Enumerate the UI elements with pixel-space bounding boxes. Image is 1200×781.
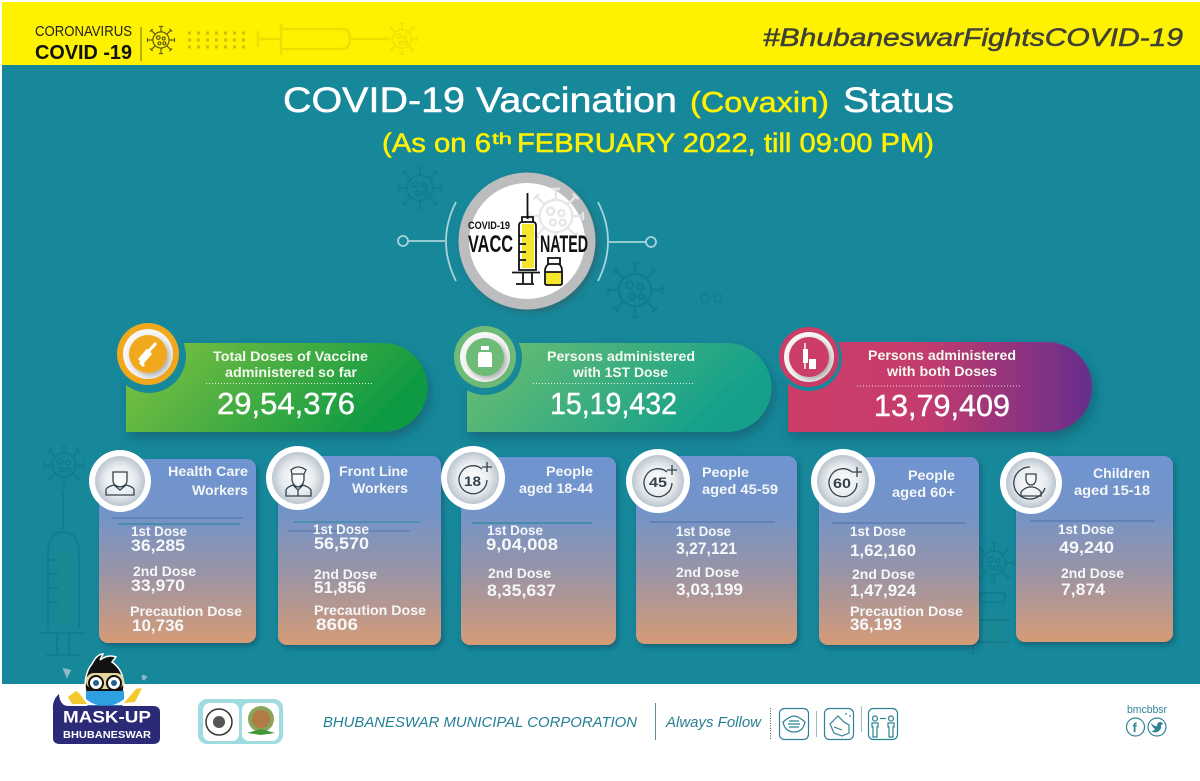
mask-up bhubaneswar logo <box>53 654 160 744</box>
icon: social distance <box>868 708 898 740</box>
top yellow header <box>2 2 1200 65</box>
panel: people aged 60 plus: Precaution Dose <box>850 604 964 619</box>
panel: both doses: 13,79,409 <box>874 388 1010 423</box>
panel: people aged 18-44: 2nd Dose <box>488 566 552 581</box>
subtitle date: th <box>492 131 512 148</box>
panel: health care workers: Precaution Dose <box>130 604 243 619</box>
government emblems <box>198 699 283 744</box>
panel: people aged 45-59: 3,27,121 <box>676 540 737 558</box>
icon: 45 plus: 45 <box>649 474 667 490</box>
social media handle: f <box>1132 720 1138 735</box>
panel: front line workers: 8606 <box>316 616 358 634</box>
icon: vial badge green <box>454 326 516 388</box>
icon: child <box>1000 452 1062 514</box>
badge text: VACC <box>468 231 513 258</box>
always follow text: Always Follow <box>665 714 762 731</box>
panel: front line workers: 56,570 <box>314 535 369 553</box>
panel: people aged 45-59: 3,03,199 <box>676 581 743 599</box>
panel: first dose: 15,19,432 <box>550 386 677 421</box>
icon: virus in header <box>148 26 174 54</box>
panel: front line workers <box>266 446 441 645</box>
panel: total doses: administered so far <box>225 365 358 380</box>
panel: people aged 60 plus: 1st Dose <box>850 524 906 539</box>
panel: both doses: Persons administered <box>868 348 1016 363</box>
connectors <box>398 202 656 281</box>
panel: people aged 60 plus: 1,62,160 <box>850 542 916 560</box>
panel: first dose <box>448 321 772 432</box>
panel: both doses: with both Doses <box>886 364 997 379</box>
icon: health worker <box>89 450 151 512</box>
decorative dots and syringe <box>188 24 417 55</box>
background watermark icons <box>40 166 1014 655</box>
subtitle date <box>382 128 934 158</box>
panel: total doses: Total Doses of Vaccine <box>213 349 369 364</box>
header label: coronavirus covid-19: CORONAVIRUS <box>35 24 132 40</box>
panel: health care workers: 33,970 <box>131 577 185 595</box>
icon: syringe and vial badge pink <box>779 327 839 387</box>
syringe icon <box>512 193 540 284</box>
panel: front line workers: Precaution Dose <box>314 603 427 618</box>
mascot <box>65 654 145 708</box>
panel: people aged 45-59: 2nd Dose <box>676 565 740 580</box>
panel: health care workers <box>89 450 256 643</box>
subtitle date: (As on 6 <box>382 128 491 158</box>
header label: coronavirus covid-19: COVID -19 <box>35 42 132 64</box>
panel: children aged 15-18: 7,874 <box>1061 581 1106 599</box>
panel: people aged 18-44 <box>441 446 616 645</box>
panel: children aged 15-18: 1st Dose <box>1058 522 1114 537</box>
panel: health care workers: 1st Dose <box>131 524 187 539</box>
icon: 18 plus: 18 <box>464 473 481 489</box>
hashtag: #BhubaneswarFightsCOVID-19 <box>763 24 1183 52</box>
mask-up bhubaneswar logo: MASK-UP <box>63 708 151 726</box>
title: COVID-19 Vaccination <box>283 81 677 120</box>
subtitle date: FEBRUARY 2022, till 09:00 PM) <box>517 128 934 158</box>
panel: children aged 15-18 <box>1000 452 1173 642</box>
icon: 60 plus: 60 <box>833 475 851 491</box>
icon: 60 plus <box>811 449 875 513</box>
panel: people aged 45-59: aged 45-59 <box>702 482 778 497</box>
icon: syringe badge orange <box>117 323 179 385</box>
panel: children aged 15-18: 49,240 <box>1059 539 1114 557</box>
panel: health care workers: 36,285 <box>131 537 185 555</box>
panel: people aged 60 plus: aged 60+ <box>892 485 955 500</box>
icon: front line worker <box>266 446 330 510</box>
panel: total doses: 29,54,376 <box>217 386 355 421</box>
panel: people aged 18-44: People <box>546 464 594 479</box>
panel: people aged 60 plus: 1,47,924 <box>850 582 917 600</box>
panel: people aged 60 plus <box>811 449 979 645</box>
badge text: NATED <box>540 231 588 258</box>
panel: health care workers: 10,736 <box>132 617 184 635</box>
panel: health care workers: Health Care <box>168 464 249 479</box>
panel: front line workers: 2nd Dose <box>314 567 378 582</box>
panel: people aged 18-44: 9,04,008 <box>486 536 558 554</box>
panel: front line workers: 51,856 <box>314 579 366 597</box>
vaccinated badge <box>398 172 656 310</box>
title: Status <box>843 81 954 120</box>
panel: front line workers: Front Line <box>339 464 409 479</box>
panel: both doses <box>776 325 1092 432</box>
mask-up bhubaneswar logo: BHUBANESWAR <box>63 729 151 741</box>
icon: 18 plus <box>441 446 505 510</box>
panel: health care workers: 2nd Dose <box>133 564 197 579</box>
panel: children aged 15-18: 2nd Dose <box>1061 566 1125 581</box>
icon: 45 plus <box>626 449 690 513</box>
badge text <box>468 220 588 258</box>
badge text: COVID-19 <box>468 220 510 232</box>
panel: front line workers: 1st Dose <box>313 522 369 537</box>
panel: people aged 45-59 <box>626 449 797 644</box>
panel: total doses <box>112 319 428 432</box>
panel: people aged 60 plus: 2nd Dose <box>852 567 916 582</box>
panel: people aged 18-44: aged 18-44 <box>519 481 594 496</box>
panel: people aged 18-44: 8,35,637 <box>487 582 556 600</box>
icon: washing hands <box>824 708 854 740</box>
footer organisation name: BHUBANESWAR MUNICIPAL CORPORATION <box>323 715 638 731</box>
panel: front line workers: Workers <box>352 481 408 496</box>
panel: children aged 15-18: Children <box>1093 466 1150 481</box>
title: (Covaxin) <box>690 87 829 119</box>
panel: health care workers: Workers <box>192 483 248 498</box>
panel: first dose: with 1ST Dose <box>572 365 669 380</box>
icon: face mask <box>780 708 808 740</box>
panel: people aged 60 plus: 36,193 <box>850 616 902 634</box>
panel: people aged 60 plus: People <box>908 468 956 483</box>
panel: children aged 15-18: aged 15-18 <box>1074 483 1151 498</box>
vial icon <box>545 258 562 285</box>
social media handle: bmcbbsr <box>1127 704 1167 716</box>
panel: first dose: Persons administered <box>547 349 695 364</box>
panel: people aged 18-44: 1st Dose <box>487 523 543 538</box>
panel: people aged 45-59: 1st Dose <box>676 524 731 539</box>
header label: coronavirus covid-19 <box>35 24 132 64</box>
panel: people aged 45-59: People <box>702 465 750 480</box>
title <box>283 81 954 120</box>
teal main panel <box>2 64 1200 684</box>
social media handle <box>1126 704 1167 736</box>
